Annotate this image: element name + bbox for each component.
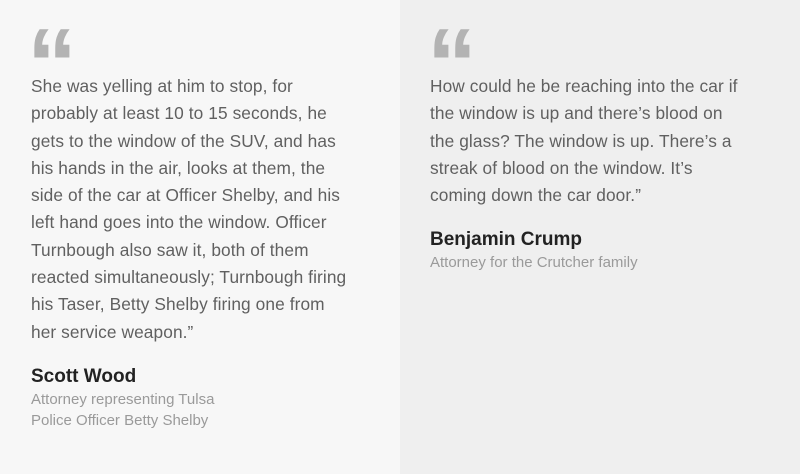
quote text: left hand goes into the window. Officer: [31, 212, 327, 232]
role: Attorney for the Crutcher family: [430, 254, 638, 271]
icon: quote mark: “: [27, 8, 71, 120]
quote text: his Taser, Betty Shelby firing one from: [31, 294, 325, 314]
quote text: side of the car at Officer Shelby, and his: [31, 185, 340, 205]
quote text: gets to the window of the SUV, and has: [31, 131, 336, 151]
role: Police Officer Betty Shelby: [31, 412, 208, 429]
quote text: She was yelling at him to stop, for: [31, 76, 293, 96]
quote text: probably at least 10 to 15 seconds, he: [31, 103, 327, 123]
quote text: her service weapon.”: [31, 322, 193, 342]
panel: right quote: [400, 0, 800, 474]
quote text: reacted simultaneously; Turnbough firing: [31, 267, 346, 287]
quote text: How could he be reaching into the car if: [430, 76, 738, 96]
quote text: streak of blood on the window. It’s: [430, 158, 693, 178]
role: [31, 391, 214, 429]
icon: quote mark: “: [427, 8, 471, 120]
quote text: [430, 76, 738, 205]
role: Attorney representing Tulsa: [31, 391, 214, 408]
quote text: his hands in the air, looks at them, the: [31, 158, 325, 178]
quote text: [31, 76, 346, 342]
quote text: the glass? The window is up. There’s a: [430, 131, 732, 151]
quote text: coming down the car door.”: [430, 185, 641, 205]
quote text: Turnbough also saw it, both of them: [31, 240, 309, 260]
quote text: the window is up and there’s blood on: [430, 103, 723, 123]
panel: left quote: [0, 0, 400, 474]
name: Benjamin Crump: [430, 229, 582, 250]
name: Scott Wood: [31, 366, 136, 387]
